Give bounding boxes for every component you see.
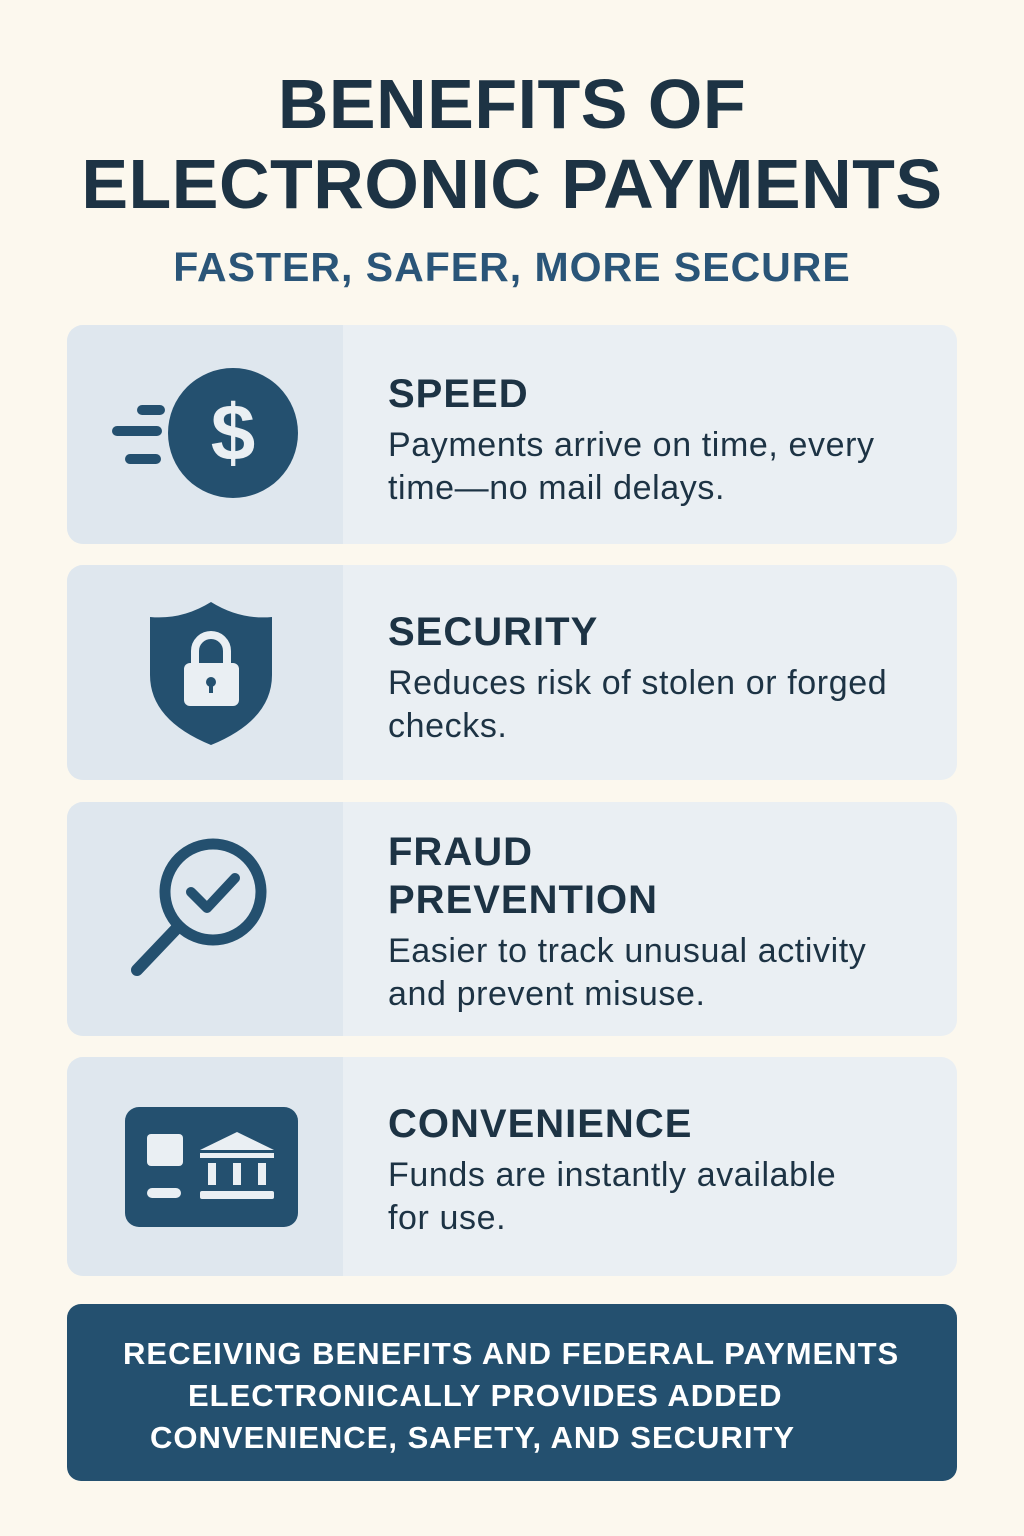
panel: convenience [67, 1057, 957, 1276]
title: ELECTRONIC PAYMENTS [81, 145, 943, 223]
icon: magnifier check [67, 802, 343, 1036]
text: fraud: FRAUD [388, 830, 533, 874]
text: speed: SPEED [388, 372, 529, 416]
text: security: checks. [388, 707, 507, 745]
title: BENEFITS OF [278, 65, 746, 143]
icon: dollar coin: $ [211, 388, 255, 477]
title [81, 65, 943, 223]
text: convenience: Funds are instantly available [388, 1156, 836, 1194]
subtitle: FASTER, SAFER, MORE SECURE [173, 244, 851, 290]
text: security: SECURITY [388, 610, 598, 654]
panel: fraud prevention [67, 802, 957, 1036]
text: speed: Payments arrive on time, every [388, 426, 875, 464]
text: convenience: CONVENIENCE [388, 1102, 692, 1146]
text: fraud: PREVENTION [388, 878, 658, 922]
text: fraud: Easier to track unusual activity [388, 932, 866, 970]
footer callout: ELECTRONICALLY PROVIDES ADDED [188, 1378, 783, 1413]
icon: shield lock [67, 565, 343, 780]
text: security: Reduces risk of stolen or forged [388, 664, 887, 702]
text: speed: time—no mail delays. [388, 469, 725, 507]
text: security [388, 610, 887, 745]
icon: dollar coin [67, 325, 343, 544]
panel: security [67, 565, 957, 780]
footer callout [67, 1304, 957, 1481]
footer callout: RECEIVING BENEFITS AND FEDERAL PAYMENTS [123, 1336, 899, 1371]
text: fraud [388, 830, 866, 1013]
icon: bank card [67, 1057, 343, 1276]
text: speed [388, 372, 875, 507]
text: fraud: and prevent misuse. [388, 975, 706, 1013]
panel: speed [67, 325, 957, 544]
text: convenience: for use. [388, 1199, 506, 1237]
text: convenience [388, 1102, 836, 1237]
footer callout: CONVENIENCE, SAFETY, AND SECURITY [150, 1420, 795, 1455]
